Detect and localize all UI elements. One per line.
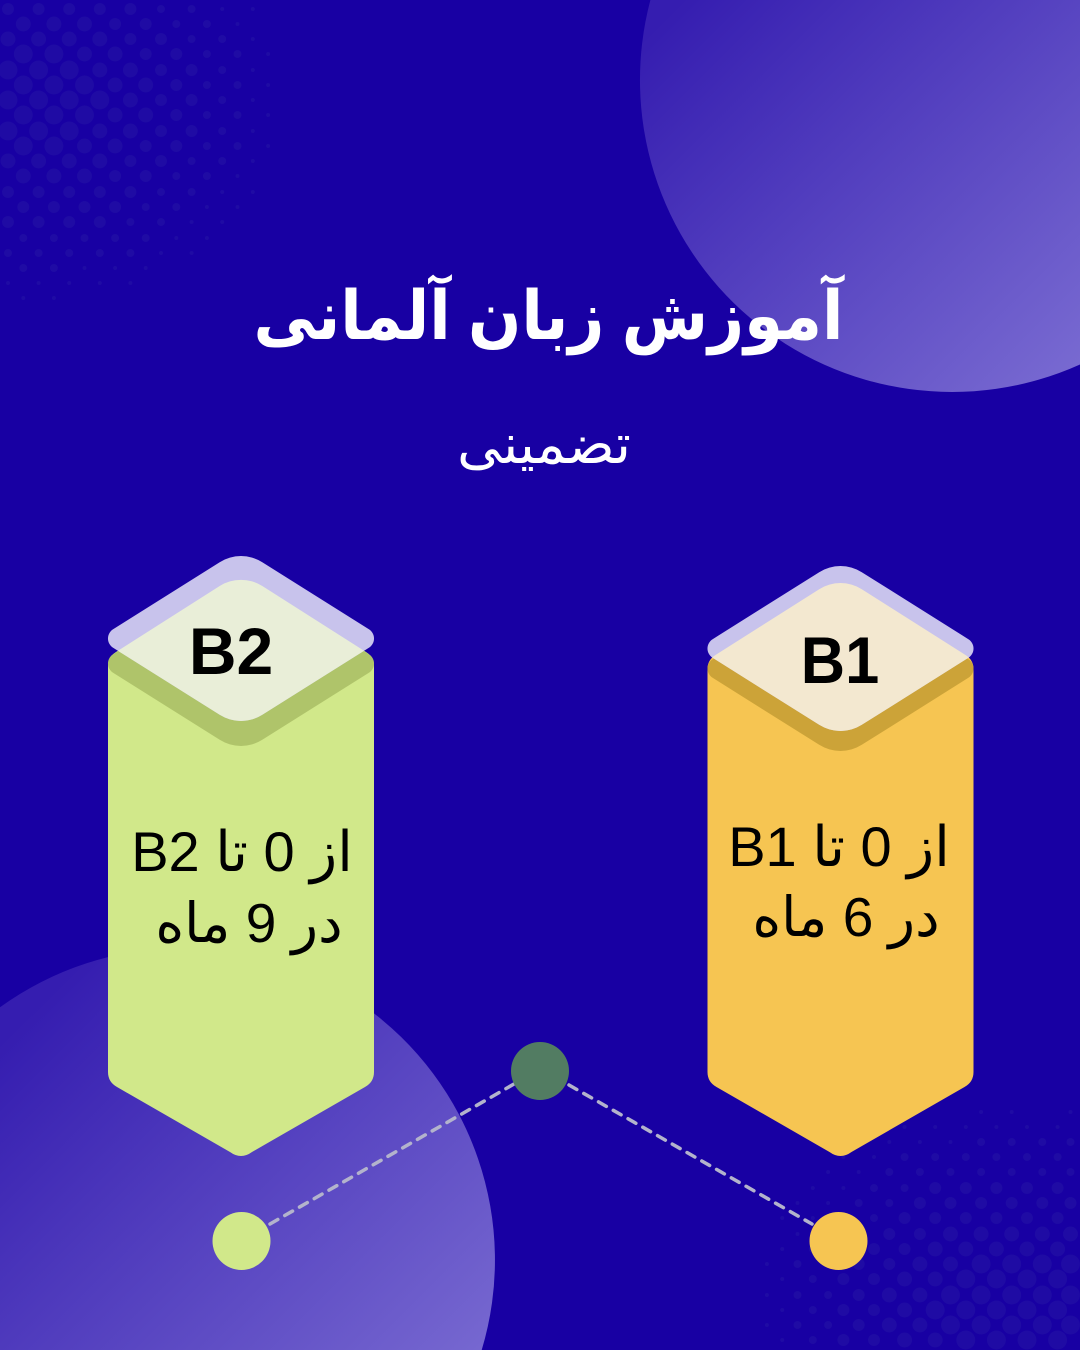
diamond cap: B2 [108, 556, 374, 721]
badge label: B1: B1 [801, 623, 879, 697]
card text: B1: از 0 تا B1 [728, 815, 950, 880]
card text: B1 [728, 815, 950, 949]
connector: dashed line to B2 dot [270, 1084, 514, 1224]
card text: B2 [131, 820, 353, 955]
shadow band: B2 [108, 581, 374, 746]
subtitle: تضمینی [457, 413, 631, 475]
background halftone: top left [8, 9, 268, 298]
card text: B1: در 6 ماه [752, 886, 940, 949]
decorative circle: bottom left [0, 948, 495, 1350]
card body: B1 [708, 583, 974, 1156]
connector: dashed line to B1 dot [569, 1085, 812, 1224]
shadow band: B1 [707, 586, 974, 751]
node: B2 [212, 1212, 270, 1270]
card text: B2: در 9 ماه [155, 892, 343, 955]
diamond overlap: B1 [712, 583, 968, 731]
diamond cap: B1 [707, 566, 974, 731]
node: B1 [810, 1212, 868, 1270]
diamond overlap: B2 [118, 580, 364, 721]
badge label: B2: B2 [189, 614, 273, 688]
card: B2 [108, 556, 374, 1156]
background halftone: bottom right [767, 1110, 1080, 1350]
title: آموزش زبان آلمانی [254, 273, 845, 356]
node: top centre [511, 1042, 569, 1100]
card text: B2: از 0 تا B2 [131, 820, 353, 885]
decorative circle: top right [640, 0, 1080, 392]
card: B1 [708, 566, 974, 1156]
card body: B2 [108, 580, 374, 1156]
